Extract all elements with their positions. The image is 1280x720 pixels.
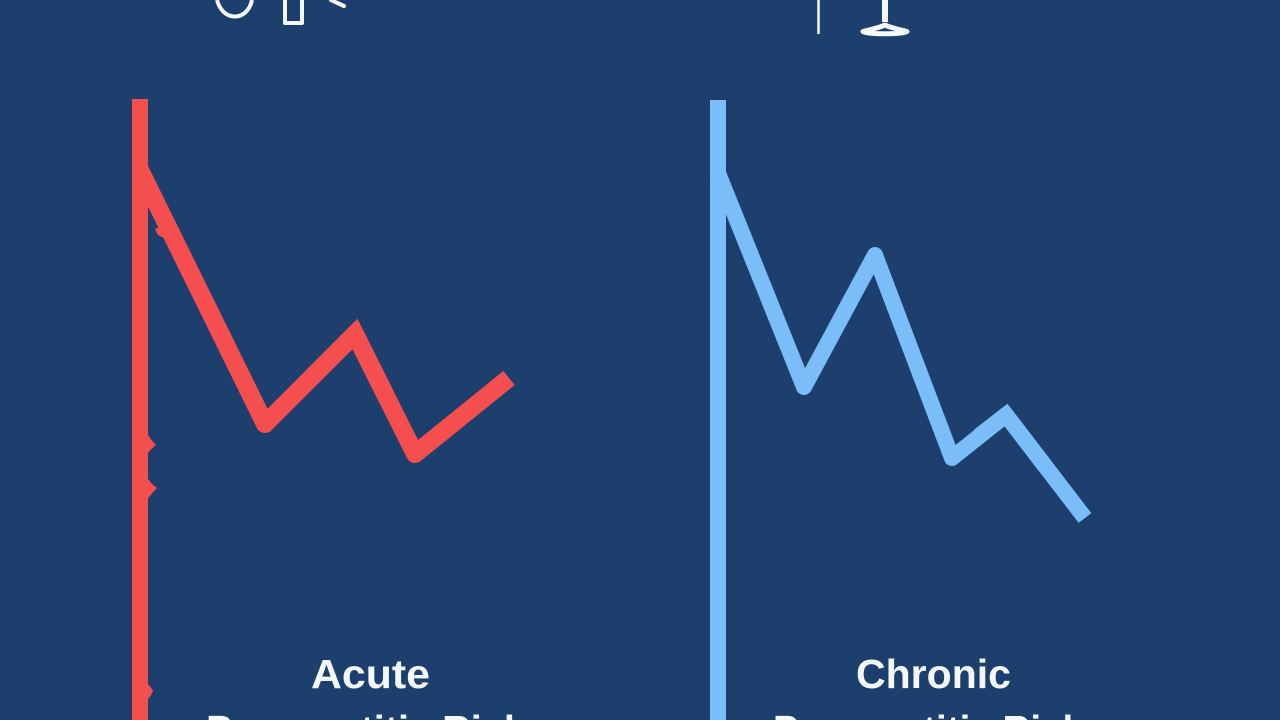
chart axis: chronic <box>710 100 726 720</box>
icon: cropped left symbol <box>217 0 344 23</box>
panel: chronic pancreatitis risk <box>710 100 1085 720</box>
heading: acute pancreatitis risk: Acute <box>311 651 430 697</box>
line chart: chronic trend <box>718 173 1085 518</box>
panel: acute pancreatitis risk <box>132 99 526 720</box>
line chart: acute trend <box>140 170 509 454</box>
heading: acute pancreatitis risk <box>206 651 526 720</box>
heading: chronic pancreatitis risk <box>773 651 1084 720</box>
chart axis: acute <box>132 99 148 720</box>
chart markers: acute axis ticks <box>147 226 164 700</box>
icon: cropped right symbol <box>818 0 907 34</box>
heading: chronic pancreatitis risk: Chronic <box>856 651 1011 697</box>
